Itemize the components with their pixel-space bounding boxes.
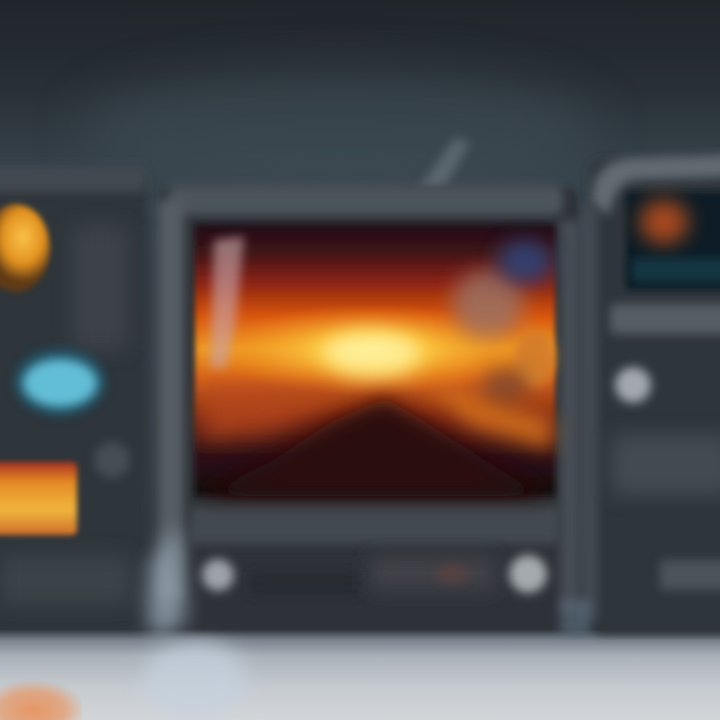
monitor chin bbox=[190, 506, 560, 544]
icon: orange banner bbox=[0, 462, 77, 535]
floor blue reflection bbox=[143, 642, 247, 718]
lower orange rays bbox=[205, 385, 345, 440]
right screen bbox=[626, 192, 720, 290]
panel: left device bbox=[0, 166, 146, 628]
monitor left bezel bbox=[158, 200, 184, 600]
panel: right device bbox=[580, 154, 720, 634]
sunset glow bbox=[210, 304, 530, 396]
icon: amber circle bbox=[0, 204, 50, 292]
icon: blue pill bbox=[14, 348, 106, 416]
monitor stand highlight bbox=[148, 525, 186, 640]
floor orange reflection bbox=[0, 672, 82, 720]
light streak bbox=[418, 138, 470, 192]
floor bbox=[0, 630, 720, 720]
dark mountain bbox=[200, 398, 550, 496]
monitor right bezel bbox=[560, 220, 580, 610]
screen image bbox=[195, 224, 555, 496]
sun core bbox=[324, 332, 420, 376]
monitor top bezel bbox=[168, 185, 563, 215]
panel: central monitor bbox=[158, 185, 580, 630]
right white knob bbox=[615, 367, 651, 403]
soft wall glow bbox=[80, 70, 600, 190]
control row bbox=[202, 555, 547, 596]
right stand highlight bbox=[560, 600, 590, 636]
side figure bbox=[452, 240, 555, 400]
screen left glare bbox=[210, 236, 244, 368]
right control bar bbox=[610, 304, 720, 334]
